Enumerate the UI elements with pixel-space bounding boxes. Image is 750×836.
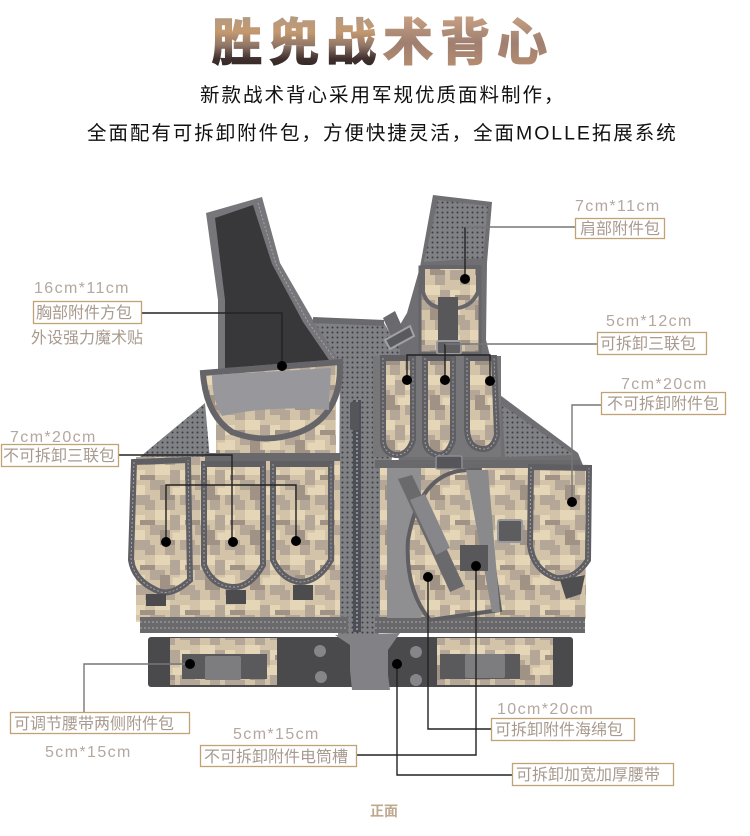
vest: holster strap — [398, 475, 464, 592]
callout: sponge pouch: 可拆卸附件海绵包 — [495, 721, 623, 739]
callout: belt side pouch: 可调节腰带两侧附件包 — [14, 715, 174, 733]
title: 胜兜战术背心 — [212, 15, 554, 71]
vest: collar and centre mesh — [134, 320, 400, 640]
vest: right side pouch — [530, 467, 589, 578]
vest: shoulder pouch — [383, 267, 480, 354]
callout: detachable triple pouch: 5cm*12cm — [606, 313, 693, 330]
vest: upper triple magazine pouch — [373, 356, 501, 457]
vest: snap buttons — [314, 645, 326, 657]
callout: shoulder pouch: 肩部附件包 — [580, 220, 660, 238]
callout: sponge pouch — [423, 572, 634, 740]
vest: zipper — [350, 400, 359, 632]
callout: fixed triple pouch: 7cm*20cm — [10, 429, 97, 446]
vest: right shoulder strap — [385, 195, 585, 470]
callout: fixed side pouch: 7cm*20cm — [621, 376, 708, 393]
vest: lower right panel — [375, 456, 589, 633]
callout: sponge pouch: 10cm*20cm — [497, 701, 594, 718]
callout: chest pouch — [31, 280, 287, 371]
vest: lower left panel — [131, 453, 348, 633]
callout: shoulder pouch: 7cm*11cm — [575, 198, 661, 215]
vest: belt — [148, 633, 573, 690]
callout: torch holder: 5cm*15cm — [233, 726, 320, 743]
intro text — [87, 84, 678, 144]
callout: chest pouch: 外设强力魔术贴 — [31, 329, 143, 347]
callout: fixed triple pouch: 不可拆卸三联包 — [3, 447, 115, 465]
callout: chest pouch: 胸部附件方包 — [36, 304, 132, 322]
vest: holster pouch — [408, 470, 500, 620]
callout: fixed side pouch: 不可拆卸附件包 — [607, 395, 719, 413]
intro text: 新款战术背心采用军规优质面料制作， — [200, 84, 566, 106]
callout: belt: 可拆卸加宽加厚腰带 — [516, 766, 660, 784]
caption: front view: 正面 — [370, 803, 398, 819]
vest: left magazine pouches — [131, 460, 331, 606]
vest: left shoulder strap — [206, 197, 342, 380]
callout: torch holder — [200, 561, 481, 766]
callout: detachable triple pouch — [402, 313, 706, 386]
callout: fixed side pouch — [567, 376, 726, 507]
vest photo — [131, 195, 589, 690]
callout: fixed triple pouch — [2, 429, 301, 547]
callout: belt side pouch — [10, 659, 195, 761]
callout: torch holder: 不可拆卸附件电筒槽 — [204, 748, 348, 766]
intro text: 全面配有可拆卸附件包，方便快捷灵活，全面MOLLE拓展系统 — [87, 122, 678, 144]
callout: shoulder pouch — [460, 198, 664, 284]
callout: detachable triple pouch: 可拆卸三联包 — [600, 335, 696, 353]
vest: centre buckle — [335, 633, 400, 690]
callout: belt — [392, 659, 674, 786]
vest: upper left pocket — [203, 362, 340, 460]
callout: chest pouch: 16cm*11cm — [34, 280, 130, 297]
callout: belt side pouch: 5cm*15cm — [45, 744, 132, 761]
